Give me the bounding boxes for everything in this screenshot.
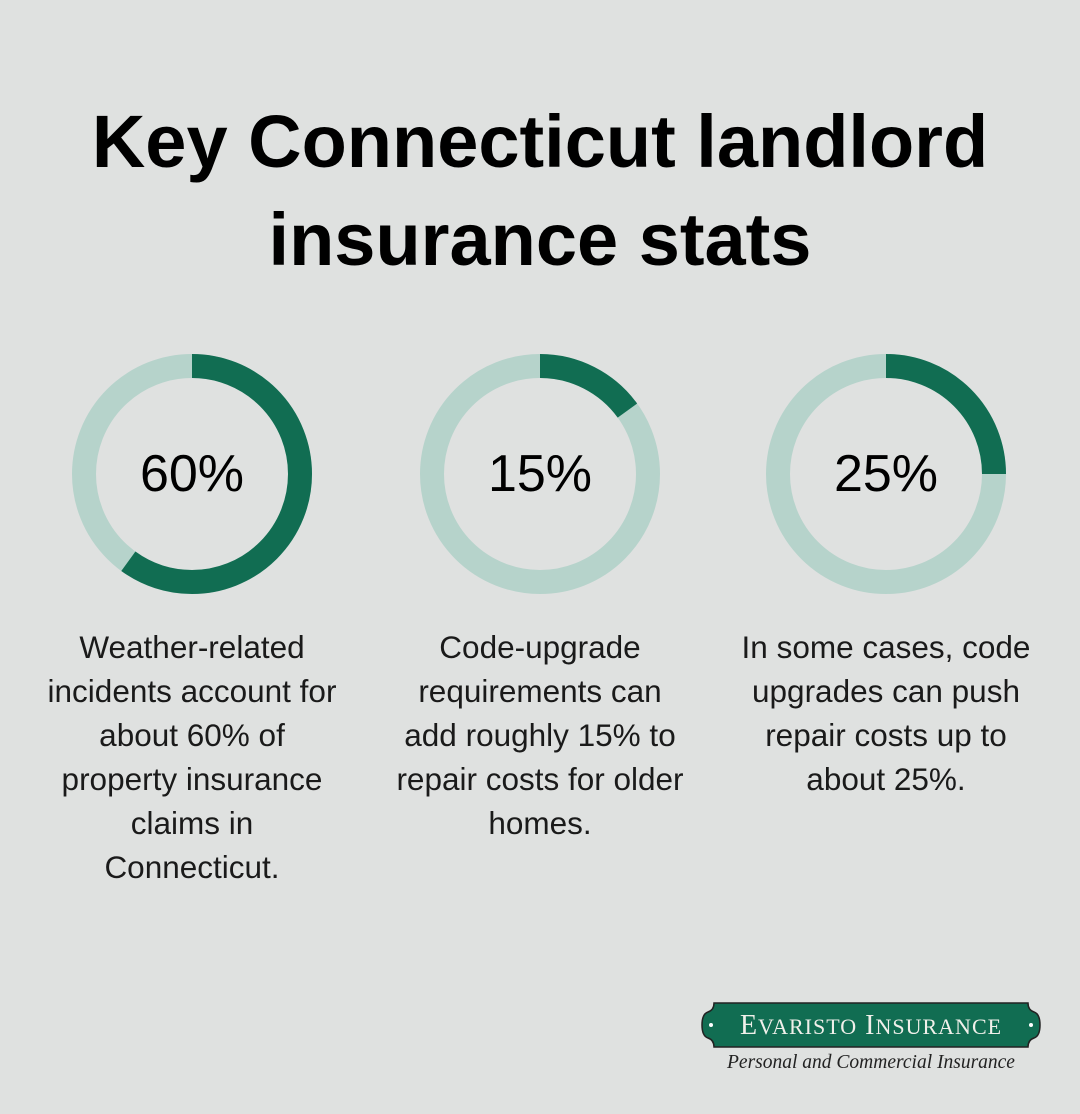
text: 15% description: Code-upgrade bbox=[439, 629, 641, 665]
text: 15% description bbox=[396, 629, 684, 841]
text: 15% description: repair costs for older bbox=[396, 761, 684, 797]
donut: 15% bbox=[420, 354, 660, 594]
logo: Personal and Commercial Insurance bbox=[727, 1052, 1015, 1073]
text: 60% description bbox=[48, 629, 336, 885]
text: 25% description: repair costs up to bbox=[765, 717, 1007, 753]
text: 25% description bbox=[742, 629, 1030, 797]
text: 60% description: property insurance bbox=[62, 761, 322, 797]
title bbox=[92, 100, 988, 281]
donut: 25% bbox=[766, 354, 1006, 594]
text: 25% description: about 25%. bbox=[806, 761, 966, 797]
text: 15% description: homes. bbox=[488, 805, 592, 841]
text: 60% description: claims in bbox=[131, 805, 253, 841]
logo: EVARISTO INSURANCE bbox=[740, 1010, 1002, 1041]
text: 60% description: about 60% of bbox=[99, 717, 285, 753]
logo bbox=[701, 1002, 1041, 1073]
title: insurance stats bbox=[269, 198, 811, 281]
donut: 60% bbox=[72, 354, 312, 594]
text: 15% description: requirements can bbox=[418, 673, 662, 709]
text: 15% description: add roughly 15% to bbox=[404, 717, 676, 753]
text: 60% description: incidents account for bbox=[48, 673, 336, 709]
donut: 60%: 60% bbox=[140, 445, 244, 503]
text: 60% description: Weather-related bbox=[79, 629, 305, 665]
donut: 15%: 15% bbox=[488, 445, 592, 503]
text: 25% description: upgrades can push bbox=[752, 673, 1020, 709]
donut: 25%: 25% bbox=[834, 445, 938, 503]
text: 60% description: Connecticut. bbox=[104, 849, 280, 885]
text: 25% description: In some cases, code bbox=[742, 629, 1030, 665]
title: Key Connecticut landlord bbox=[92, 100, 988, 183]
